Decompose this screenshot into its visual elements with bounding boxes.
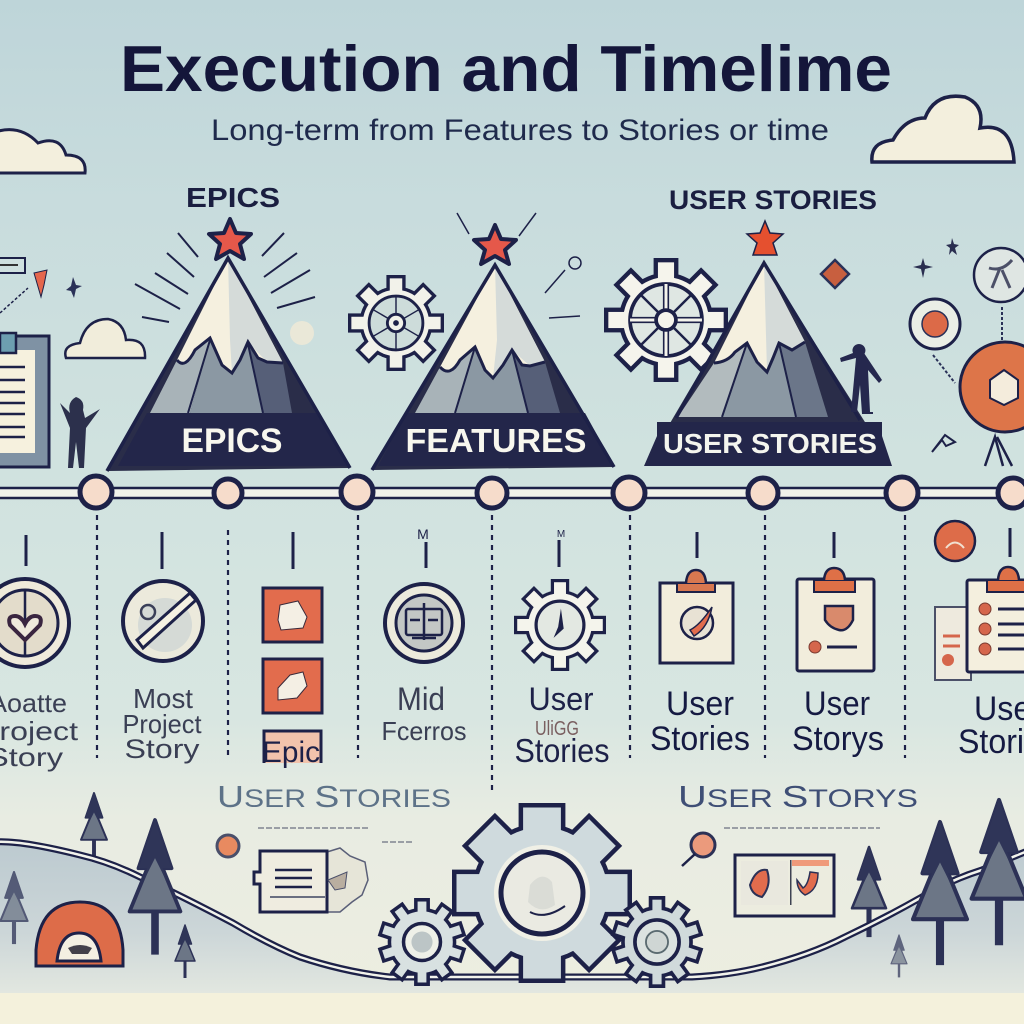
column labels: User xyxy=(804,685,870,723)
heading: user stories: USER STORIES xyxy=(669,185,877,215)
title: Execution and Timelime xyxy=(120,32,892,105)
icon: cloud mid xyxy=(65,319,145,358)
icon: picture frame xyxy=(735,855,834,916)
subtitle: Long-term from Features to Stories or time xyxy=(211,114,829,147)
landscape hills xyxy=(0,842,1024,993)
icon: ticket left xyxy=(217,835,368,912)
mountain: user stories xyxy=(644,221,892,466)
mountain: epics: EPICS xyxy=(182,422,282,460)
icon: small sketch circle xyxy=(569,257,581,269)
column labels: Most xyxy=(133,683,193,714)
rays: epics xyxy=(135,233,315,322)
mountain: features: FEATURES xyxy=(406,422,586,459)
rays: features xyxy=(457,213,580,318)
icon: top-left small marks xyxy=(0,258,82,313)
small tick marks xyxy=(26,528,1010,569)
icon: person right xyxy=(840,344,882,414)
column labels xyxy=(0,681,1024,772)
trees front xyxy=(130,800,1024,965)
faint caption lines xyxy=(258,828,880,842)
column labels: Mid xyxy=(397,681,445,717)
icon: gear upper right xyxy=(604,258,728,382)
icon: red squares: Epic xyxy=(262,736,320,769)
ground xyxy=(0,993,1024,1024)
icon: circle heart xyxy=(0,579,69,667)
icon: clipboard left xyxy=(0,333,49,467)
icon: pin xyxy=(682,833,715,866)
icon: book circle xyxy=(385,584,463,662)
column labels: Stories xyxy=(514,732,610,769)
icon: red dome xyxy=(36,902,123,966)
winding road xyxy=(0,842,1024,977)
icon: gear clock xyxy=(514,579,606,671)
icon: cloud right xyxy=(872,96,1014,162)
column labels: Storys xyxy=(792,720,884,758)
column labels: User xyxy=(666,685,734,723)
icon: sun blob xyxy=(290,321,314,345)
small letters above ticks xyxy=(417,526,565,542)
column labels: Stories xyxy=(650,720,750,758)
heading: epics: EPICS xyxy=(186,182,280,213)
heading: user storys lower right: U SER STORYS xyxy=(678,779,918,814)
icon: red squares xyxy=(262,588,322,769)
column labels: Story xyxy=(124,734,200,764)
mountain: epics xyxy=(107,219,350,471)
icon: clipboard 2 xyxy=(797,568,874,671)
icon: clipboard 1 xyxy=(660,570,733,663)
column labels: Fcerros xyxy=(382,716,466,746)
small letters above ticks: M xyxy=(557,529,565,540)
column labels: User xyxy=(528,681,594,717)
mountain: features xyxy=(372,225,614,470)
dashed dividers xyxy=(97,515,905,790)
column labels: Project xyxy=(122,709,202,739)
timeline xyxy=(0,476,1024,509)
small letters above ticks: M xyxy=(417,526,429,542)
heading: user stories lower left: USER STORIES xyxy=(217,779,451,814)
right side icons xyxy=(821,238,1024,466)
icon: cloud left xyxy=(0,130,85,173)
column labels: UliGG xyxy=(535,718,579,740)
icon: central gears xyxy=(378,803,703,988)
mountain: user stories: USER STORIES xyxy=(663,428,877,459)
icon: person left xyxy=(60,397,100,468)
trees behind xyxy=(0,793,907,978)
icon: prohibited circle xyxy=(123,581,203,661)
icon: clipboard 3 xyxy=(935,521,1024,680)
icon: gear upper left xyxy=(348,275,444,371)
